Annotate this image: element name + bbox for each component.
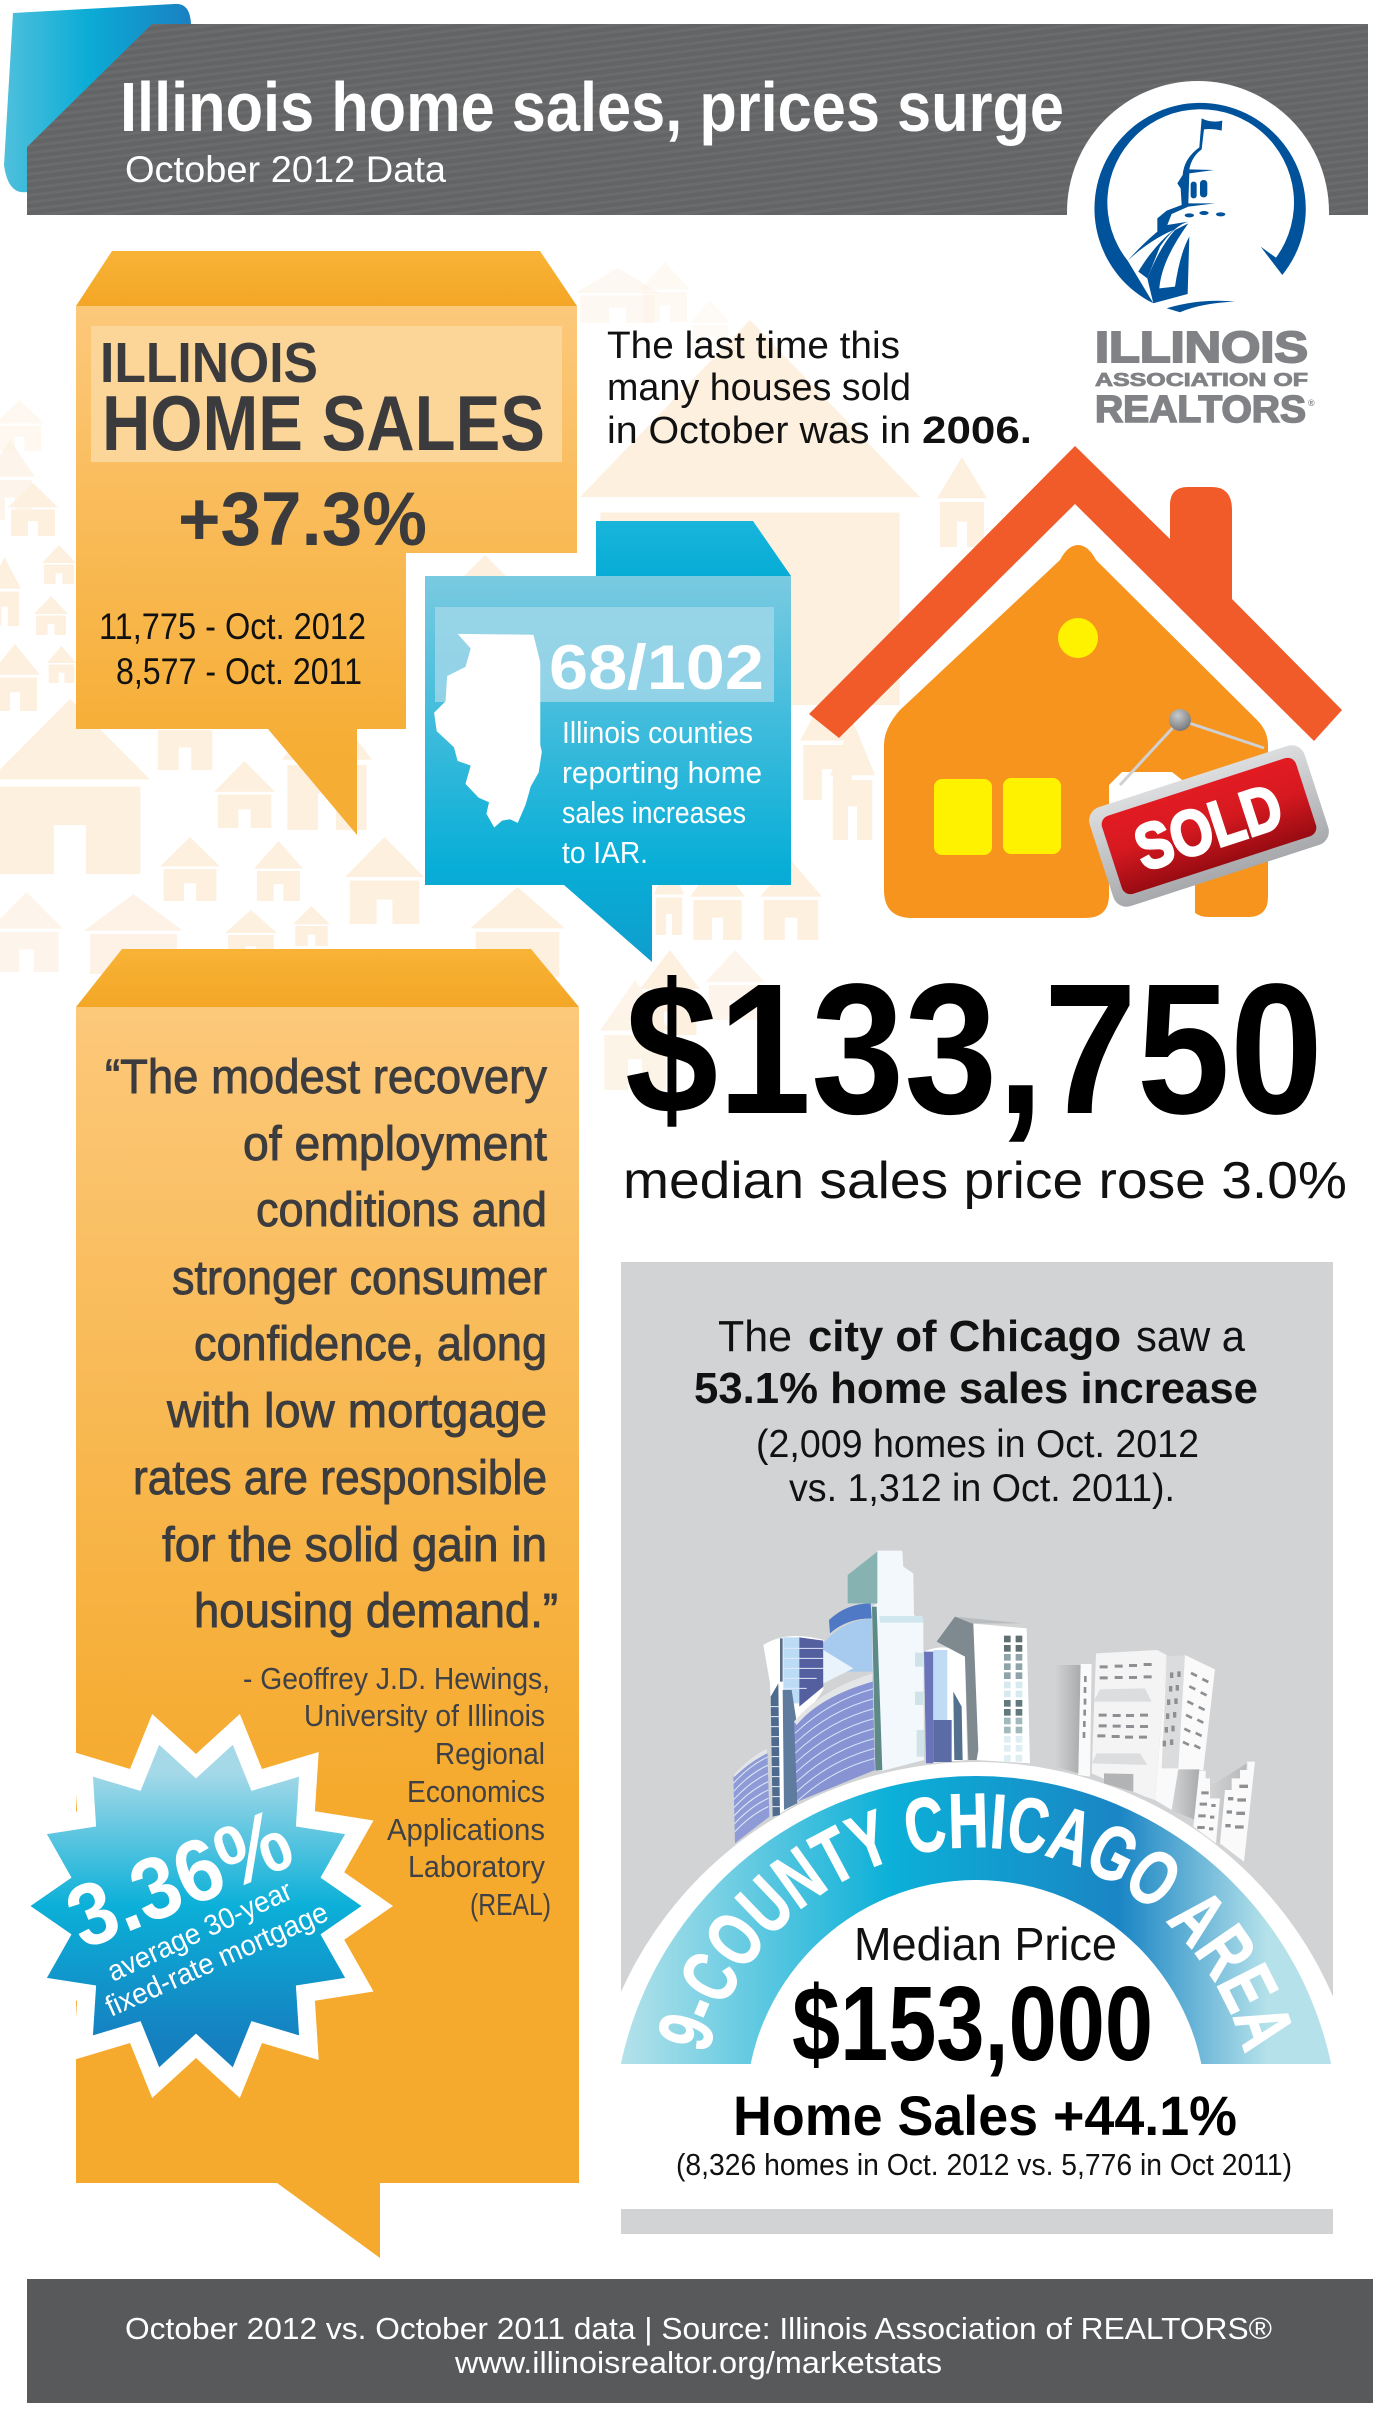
panel: Chicago	[621, 1262, 1333, 2234]
text: last time this many houses sold: The last time this	[607, 325, 900, 367]
area median price: $153,000	[792, 1965, 1153, 2083]
attic window	[1058, 618, 1098, 658]
back shadow	[1055, 1665, 1081, 1773]
title: Illinois home sales, prices surge	[120, 68, 1064, 146]
city of Chicago text: 53.1% home sales increase	[694, 1364, 1258, 1413]
median price label: Median Price	[854, 1918, 1117, 1970]
quote attribution: University of Illinois	[304, 1698, 545, 1733]
heading: HOME SALES	[102, 379, 545, 467]
quote attribution	[243, 1661, 551, 1922]
logo wordmark: ASSOCIATION OF	[1095, 370, 1308, 390]
website: www.illinoisrealtor.org/marketstats	[454, 2345, 942, 2380]
city of Chicago text	[694, 1312, 1258, 1510]
door	[1109, 772, 1195, 918]
counties number: 68/102	[549, 633, 764, 703]
quote text: for the solid gain in	[162, 1519, 547, 1572]
quote text: of employment	[243, 1118, 547, 1171]
icon: capitol dome in ring	[1094, 103, 1306, 312]
right blue tower	[924, 1647, 967, 1763]
left tower	[763, 1636, 824, 1817]
dark striped banner	[27, 24, 1368, 215]
rate figure: 3.36%	[53, 1789, 305, 1968]
quote text: with low mortgage	[166, 1385, 547, 1438]
small shade block	[1172, 1769, 1199, 1820]
home sales counts: 11,775 - Oct. 2012	[99, 606, 366, 647]
text: last time this many houses sold: 2006.	[922, 410, 1032, 452]
starburst blue fill	[31, 1745, 361, 2067]
counties description	[562, 715, 762, 870]
icon: Illinois state outline	[434, 634, 542, 828]
logo wordmark: REALTORS	[1095, 389, 1306, 431]
text: last time this many houses sold: in October was in	[607, 410, 911, 452]
home sales counts	[99, 606, 366, 692]
quote text: rates are responsible	[133, 1452, 547, 1505]
narrow strip building	[1078, 1664, 1092, 1777]
grey panel background	[621, 1262, 1333, 2234]
callout body	[425, 576, 791, 962]
main building	[1092, 1650, 1167, 1800]
rate caption: fixed-rate mortgage	[101, 1897, 333, 2023]
house roof and chimney	[809, 446, 1342, 741]
windows	[934, 778, 1061, 855]
callout body	[76, 1007, 579, 2258]
balconies	[1093, 1688, 1152, 1702]
front curved tower	[794, 1676, 875, 1802]
quote attribution: Applications	[387, 1812, 545, 1847]
heading: ILLINOIS	[100, 331, 318, 395]
callout body	[76, 306, 577, 835]
area home sales change: Home Sales +44.1%	[733, 2084, 1237, 2147]
illustration: white office buildings	[1055, 1650, 1255, 1862]
small stepped buildings	[1210, 1763, 1247, 1843]
city of Chicago text: saw a	[1136, 1312, 1245, 1361]
sold sign	[1085, 742, 1333, 910]
city of Chicago text: (2,009 homes in Oct. 2012	[756, 1423, 1199, 1466]
text: last time this many houses sold	[607, 325, 1032, 452]
white arc outline	[621, 1762, 1333, 2064]
sign strings	[1120, 720, 1264, 785]
logo white backing	[1067, 81, 1329, 216]
illustration: sold house	[809, 446, 1342, 918]
blue folded corner	[4, 4, 191, 192]
heading box	[91, 326, 562, 462]
starburst white border	[0, 1714, 393, 2098]
counties description: to IAR.	[562, 835, 648, 870]
quote attribution: (REAL)	[470, 1887, 551, 1922]
house body	[884, 545, 1268, 918]
quote text: stronger consumer	[172, 1252, 547, 1305]
right tower	[1155, 1655, 1185, 1800]
logo: Illinois Association of Realtors	[1067, 81, 1329, 431]
quote attribution: Economics	[407, 1774, 545, 1809]
rate caption: average 30-year	[102, 1875, 298, 1988]
callout roof	[76, 949, 579, 1007]
logo wordmark: ®	[1308, 398, 1315, 408]
home sales counts: 8,577 - Oct. 2011	[116, 651, 362, 692]
city of Chicago text: vs. 1,312 in Oct. 2011).	[789, 1467, 1175, 1510]
quote attribution: Laboratory	[408, 1849, 545, 1884]
text: last time this many houses sold: many houses sold	[607, 367, 911, 409]
quote text	[105, 1051, 558, 1638]
nail	[1169, 709, 1191, 731]
median price caption: median sales price rose 3.0%	[623, 1152, 1347, 1210]
subtitle: October 2012 Data	[125, 149, 446, 190]
callout roof	[76, 251, 577, 306]
counties description: Illinois counties	[562, 715, 753, 750]
far left curved tower	[733, 1748, 769, 1843]
logo wordmark	[1095, 323, 1315, 431]
quote attribution: - Geoffrey J.D. Hewings,	[243, 1661, 550, 1696]
teal arc band	[621, 1776, 1332, 2064]
background house pattern	[0, 262, 987, 1090]
grey roof tower	[972, 1623, 1030, 1763]
quote text: “The modest recovery	[105, 1051, 547, 1104]
footer bar	[27, 2279, 1373, 2403]
source line: October 2012 vs. October 2011 data | Source: Illinois Association of REALTORS®	[125, 2311, 1272, 2346]
quote attribution: Regional	[435, 1736, 545, 1771]
logo wordmark: ILLINOIS	[1095, 323, 1308, 372]
city of Chicago text: city of Chicago	[808, 1312, 1121, 1361]
quote text: confidence, along	[194, 1318, 547, 1371]
upper blue tower	[829, 1603, 872, 1633]
city of Chicago text: The	[718, 1312, 792, 1361]
quote text: conditions and	[256, 1184, 547, 1237]
quote text: housing demand.”	[194, 1585, 558, 1638]
counties description: sales increases	[562, 795, 746, 830]
white info band	[621, 2064, 1333, 2209]
panel: Illinois home sales callout	[76, 251, 577, 835]
badge: mortgage rate starburst	[0, 1714, 393, 2098]
counties number box	[435, 607, 774, 702]
panel: counties callout	[425, 521, 791, 962]
arc inner white	[750, 1880, 1202, 2064]
arc title: 9-COUNTY CHICAGO AREA	[659, 1793, 1292, 2054]
footer	[27, 2279, 1373, 2403]
header banner	[4, 4, 1368, 215]
counties description: reporting home	[562, 755, 762, 790]
callout roof	[596, 521, 791, 576]
center tall tower	[872, 1551, 924, 1771]
median price figure: $133,750	[625, 946, 1323, 1153]
area home sales counts: (8,326 homes in Oct. 2012 vs. 5,776 in Oct 2011)	[676, 2147, 1292, 2182]
sold sign: SOLD	[1126, 770, 1291, 885]
illustration: glass skyscrapers	[733, 1551, 1030, 1843]
heading	[100, 331, 545, 467]
panel: expert quote callout	[76, 949, 579, 2258]
home sales change: +37.3%	[178, 477, 427, 562]
